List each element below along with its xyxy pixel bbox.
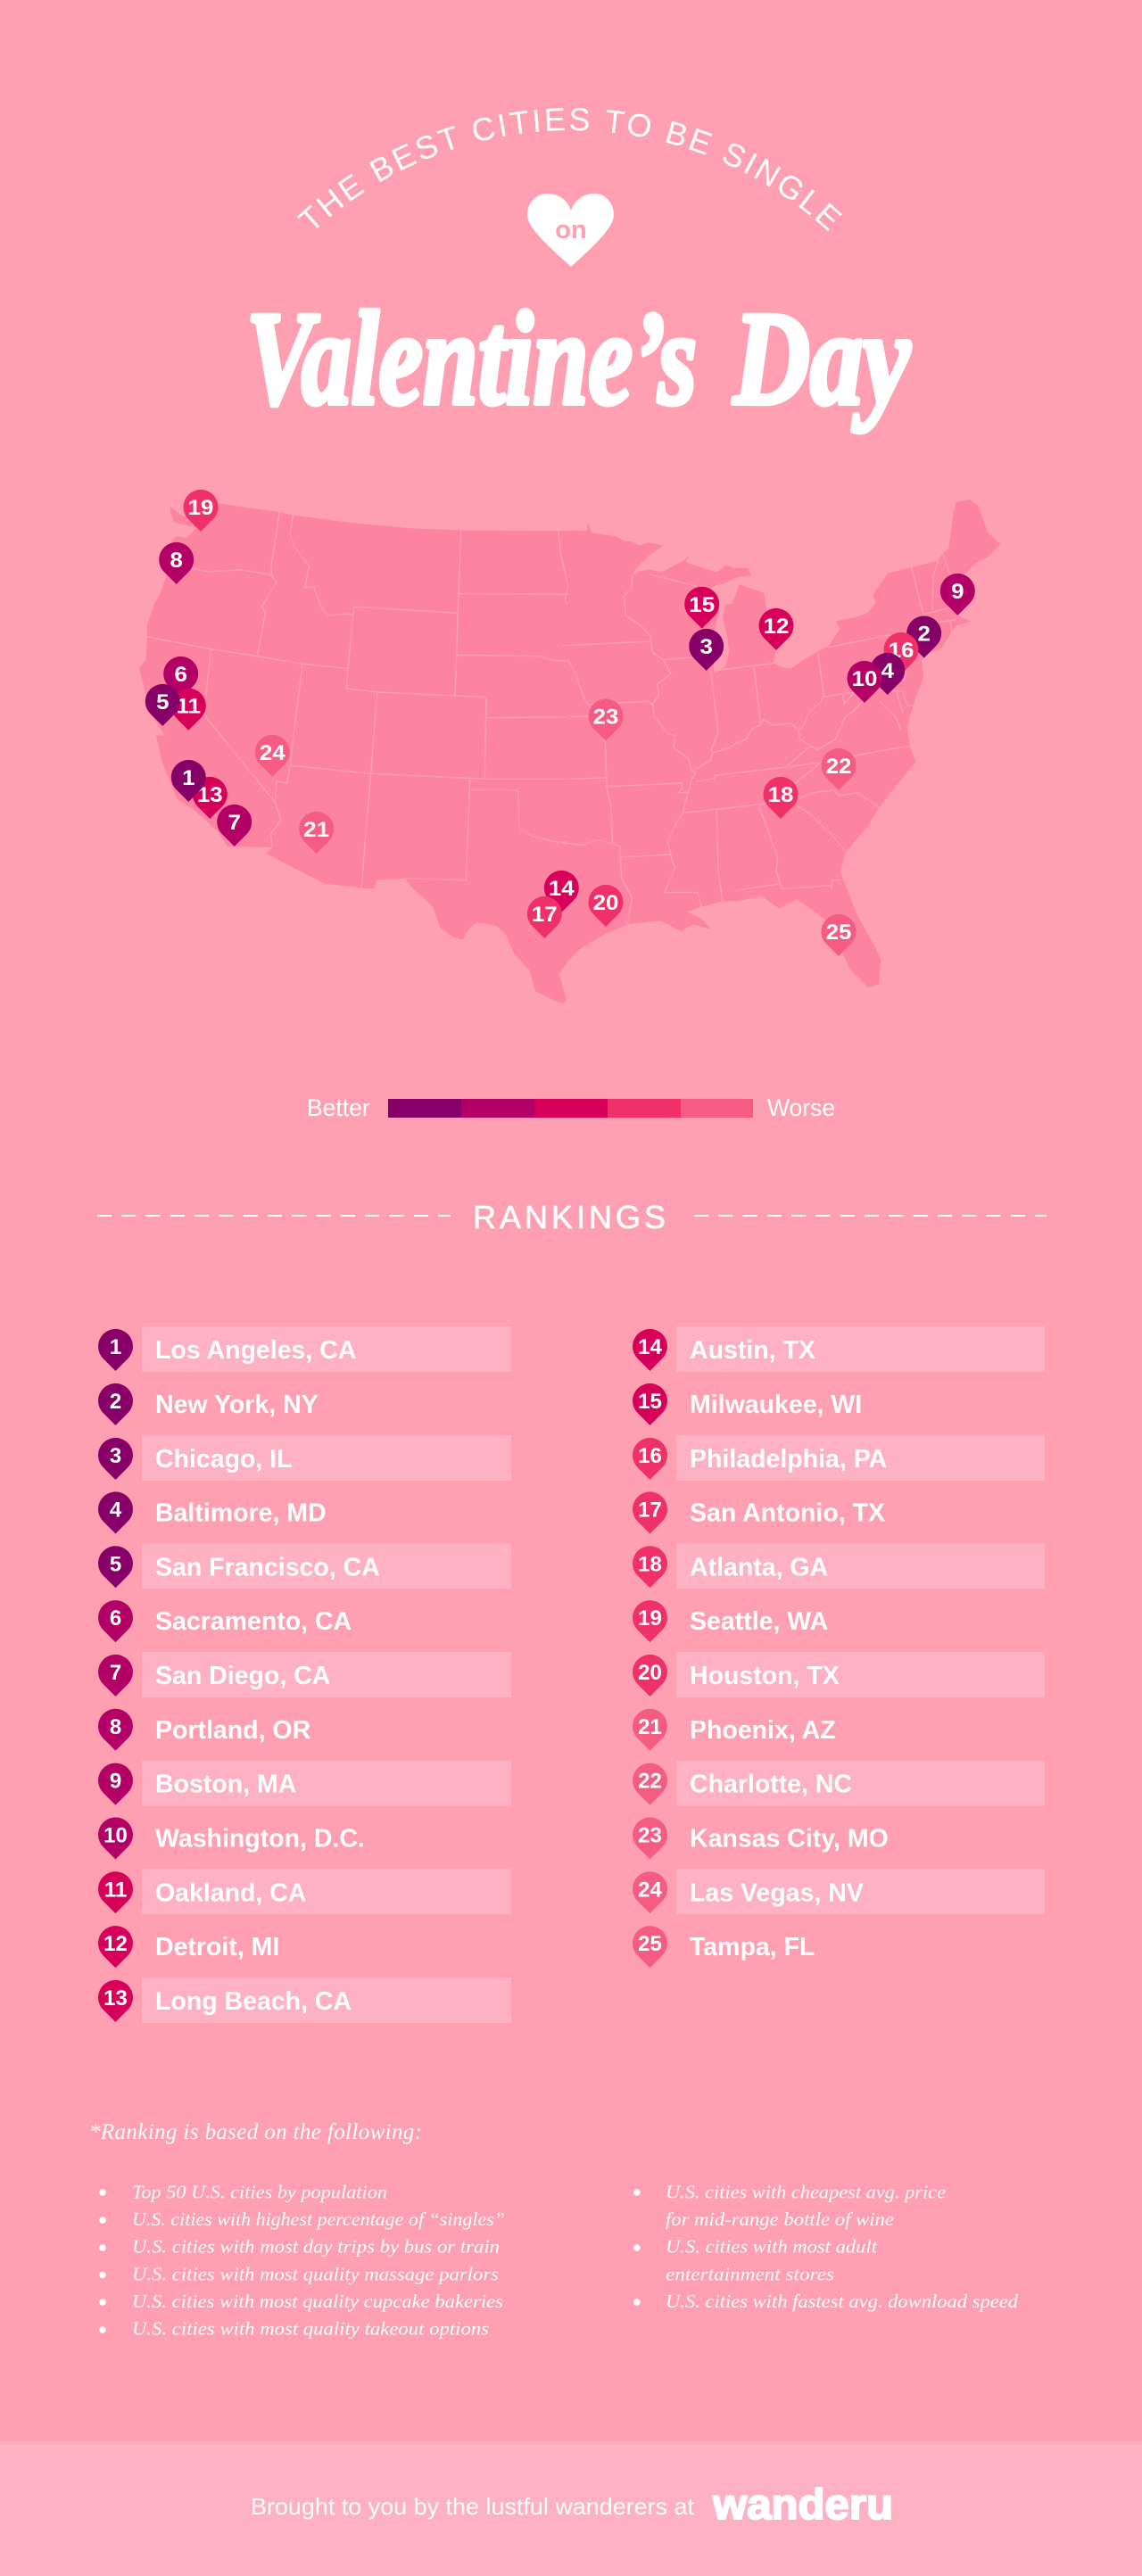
rank 19: 19 <box>638 1606 662 1631</box>
rank 3: Chicago, IL <box>155 1445 293 1474</box>
pin 25 <box>821 914 856 956</box>
rank 10: Washington, D.C. <box>155 1825 365 1854</box>
legend: better to worse <box>307 1094 835 1121</box>
rank 5: 5 <box>110 1552 121 1576</box>
rank 1: Los Angeles, CA <box>155 1336 356 1365</box>
pin 14 <box>544 871 579 912</box>
rank 2 <box>98 1383 319 1425</box>
pin 16: 16 <box>889 639 914 663</box>
rank 20 <box>633 1652 1045 1697</box>
map: eastern states <box>562 500 1001 987</box>
methodology notes <box>89 2120 1019 2340</box>
rank 20: 20 <box>638 1661 662 1685</box>
rank 21: 21 <box>638 1715 662 1739</box>
rank 6: Sacramento, CA <box>155 1607 352 1636</box>
rank 9: Boston, MA <box>155 1771 296 1799</box>
map pins <box>145 490 975 956</box>
rank 7: San Diego, CA <box>155 1662 330 1690</box>
pin 17: 17 <box>532 903 558 927</box>
pin 4 <box>870 653 905 695</box>
pin 22 <box>821 748 856 790</box>
rank 23 <box>633 1817 889 1859</box>
rank 15: 15 <box>638 1390 662 1414</box>
logo: wanderu: wanderu <box>712 2481 893 2529</box>
rank 14: Austin, TX <box>690 1336 815 1365</box>
rank 11 <box>98 1869 511 1914</box>
rank 25 <box>633 1926 815 1968</box>
pin 3: 3 <box>699 635 713 659</box>
footer band <box>0 2441 1142 2576</box>
rank 1: 1 <box>110 1335 121 1359</box>
rankings list: right column <box>633 1326 1045 1968</box>
pin 18 <box>764 777 798 819</box>
notes: left bullets: U.S. cities with most quality massage parlors <box>132 2263 499 2284</box>
notes: right bullets: U.S. cities with fastest avg. download speed <box>666 2291 1019 2312</box>
pin 5 <box>145 684 180 726</box>
rank 18: Atlanta, GA <box>690 1553 828 1581</box>
rank 16: 16 <box>638 1444 662 1468</box>
map: western states <box>139 498 580 1003</box>
title: Valentine's Day: Day <box>732 285 911 433</box>
icon: heart with on <box>527 194 614 267</box>
pin 22: 22 <box>826 755 851 779</box>
pin 2 <box>906 616 941 658</box>
rank 13: Long Beach, CA <box>155 1987 352 2016</box>
rank 3 <box>98 1435 511 1481</box>
pin 4: 4 <box>881 659 894 683</box>
notes: left bullets: U.S. cities with most quality cupcake bakeries <box>132 2291 503 2312</box>
notes heading: *Ranking is based on the following: <box>89 2120 422 2144</box>
icon: heart with on: on <box>555 216 587 244</box>
pin 7 <box>217 805 252 846</box>
notes: left bullets: U.S. cities with most quality takeout options <box>132 2318 489 2340</box>
pin 24: 24 <box>260 741 286 765</box>
rank 19 <box>633 1600 828 1642</box>
pin 3 <box>689 629 724 671</box>
map: United States <box>139 490 1001 1003</box>
rank 1 <box>98 1326 511 1372</box>
pin 11 <box>171 689 206 731</box>
notes: right bullets: entertainment stores <box>666 2263 834 2284</box>
pin 25: 25 <box>826 921 852 945</box>
rank 19: Seattle, WA <box>690 1607 828 1636</box>
rank 13 <box>98 1977 511 2023</box>
rank 21: Phoenix, AZ <box>690 1716 836 1745</box>
pin 9: 9 <box>951 580 964 604</box>
rank 24 <box>633 1869 1045 1914</box>
notes: right bullets: for mid-range bottle of wine <box>666 2209 894 2230</box>
rank 8: 8 <box>110 1715 121 1739</box>
rank 22: Charlotte, NC <box>690 1771 852 1799</box>
pin 7: 7 <box>228 811 241 835</box>
notes: left bullets: U.S. cities with most day trips by bus or train <box>132 2236 500 2258</box>
pin 21: 21 <box>303 818 329 842</box>
notes: right bullets <box>633 2181 1019 2312</box>
rank 6: 6 <box>110 1606 121 1631</box>
pin 13: 13 <box>197 783 223 807</box>
notes: right bullets: U.S. cities with most adult <box>666 2236 878 2258</box>
rank 16: Philadelphia, PA <box>690 1445 887 1474</box>
rank 7 <box>98 1652 511 1697</box>
notes: left bullets <box>99 2181 505 2340</box>
rank 17 <box>633 1491 885 1534</box>
rank 25: Tampa, FL <box>690 1933 815 1961</box>
rank 10: 10 <box>103 1823 128 1848</box>
rank 4 <box>98 1491 327 1534</box>
pin 1: 1 <box>182 766 195 790</box>
rank 18 <box>633 1543 1045 1589</box>
rank 6 <box>98 1600 352 1642</box>
rank 24: 24 <box>638 1878 662 1902</box>
rank 18: 18 <box>638 1552 662 1576</box>
rank 17: San Antonio, TX <box>690 1499 885 1527</box>
pin 1 <box>171 760 206 802</box>
pin 12: 12 <box>764 615 789 639</box>
pin 10 <box>848 661 881 703</box>
pin 24 <box>255 735 290 777</box>
pin 16 <box>883 632 919 674</box>
pin 11: 11 <box>177 695 201 718</box>
rank 23: Kansas City, MO <box>690 1825 889 1854</box>
rank 15: Milwaukee, WI <box>690 1391 862 1419</box>
pin 10: 10 <box>852 667 877 691</box>
footer credit text: Brought to you by the lustful wanderers at <box>251 2493 695 2520</box>
pin 9 <box>940 574 975 615</box>
rank 24: Las Vegas, NV <box>690 1878 864 1907</box>
pin 19: 19 <box>188 496 213 520</box>
rank 12 <box>98 1926 279 1968</box>
rank 9 <box>98 1761 511 1806</box>
pin 8: 8 <box>170 549 183 573</box>
rank 15 <box>633 1383 862 1425</box>
rank 23: 23 <box>638 1823 662 1848</box>
pin 23: 23 <box>593 705 618 729</box>
rank 25: 25 <box>638 1932 662 1956</box>
heading: rankings: RANKINGS <box>473 1199 666 1235</box>
pin 20: 20 <box>593 891 618 915</box>
rank 2: 2 <box>110 1390 121 1414</box>
legend: better to worse: Worse <box>767 1094 835 1121</box>
rank 14: 14 <box>638 1335 662 1359</box>
rank 4: 4 <box>110 1499 122 1522</box>
rank 11: Oakland, CA <box>155 1878 306 1907</box>
pin 2: 2 <box>917 622 931 646</box>
rank 9: 9 <box>110 1770 121 1794</box>
rank 3: 3 <box>110 1444 121 1468</box>
title: the best cities to be single: THE BEST CITIES TO BE SINGLE <box>296 108 842 231</box>
rank 10 <box>98 1817 365 1859</box>
rank 14 <box>633 1326 1045 1372</box>
rank 12: 12 <box>103 1932 128 1956</box>
rank 20: Houston, TX <box>690 1662 840 1690</box>
pin 15 <box>684 587 719 629</box>
pin 21 <box>299 812 334 854</box>
pin 6: 6 <box>174 663 187 687</box>
rank 5 <box>98 1543 511 1589</box>
rank 8 <box>98 1709 310 1751</box>
rank 12: Detroit, MI <box>155 1933 279 1961</box>
rank 22: 22 <box>638 1770 662 1794</box>
pin 13 <box>193 777 228 819</box>
pin 6 <box>163 656 198 698</box>
pin 8 <box>159 542 194 584</box>
rank 22 <box>633 1761 1045 1806</box>
pin 15: 15 <box>689 593 715 617</box>
notes: right bullets: U.S. cities with cheapest avg. price <box>666 2181 946 2202</box>
pin 19 <box>184 490 218 532</box>
pin 23 <box>589 698 623 740</box>
pin 12 <box>758 608 794 650</box>
legend: better to worse: Better <box>307 1094 370 1121</box>
pin 14: 14 <box>549 877 575 901</box>
rank 4: Baltimore, MD <box>155 1499 327 1527</box>
rank 16 <box>633 1435 1045 1481</box>
notes: left bullets: U.S. cities with highest percentage of “singles” <box>132 2209 505 2230</box>
title: Valentine's Day: Valentine’s <box>246 285 697 433</box>
rankings list: left column <box>98 1326 511 2023</box>
rank 21 <box>633 1709 836 1751</box>
rank 17: 17 <box>638 1499 662 1522</box>
rank 5: San Francisco, CA <box>155 1553 380 1581</box>
rank 7: 7 <box>110 1661 121 1685</box>
rank 11: 11 <box>104 1878 127 1902</box>
pin 18: 18 <box>768 783 794 807</box>
pin 5: 5 <box>156 690 170 714</box>
pin 20 <box>589 885 623 927</box>
pin 17 <box>527 896 562 938</box>
rank 8: Portland, OR <box>155 1716 310 1745</box>
notes: left bullets: Top 50 U.S. cities by population <box>132 2181 387 2202</box>
rank 2: New York, NY <box>155 1391 319 1419</box>
rank 13: 13 <box>103 1986 128 2010</box>
